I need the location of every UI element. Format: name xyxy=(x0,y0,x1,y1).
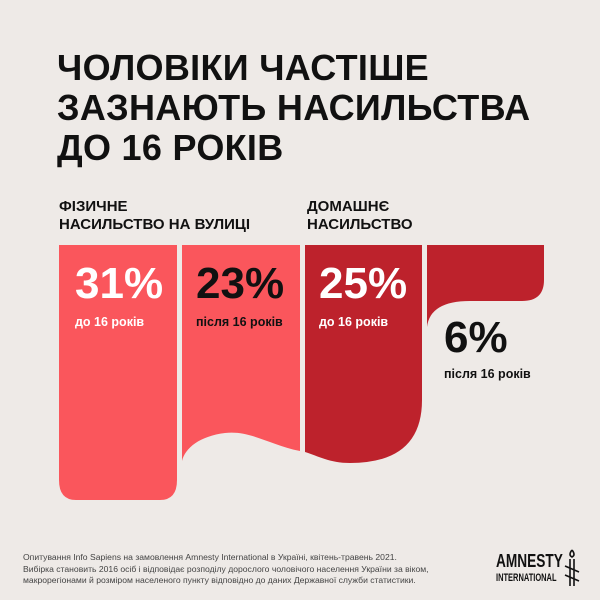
footnote xyxy=(23,552,429,585)
logo: Amnesty International: INTERNATIONAL xyxy=(496,572,557,584)
title xyxy=(57,47,530,168)
subheading: domestic violence: ДОМАШНЄ xyxy=(307,198,389,215)
footnote: Опитування Info Sapiens на замовлення Amnesty International в Україні, квітень-травень 2021. xyxy=(23,552,397,562)
value: 25%: до 16 років xyxy=(319,315,388,329)
value: 31%: 31% xyxy=(75,259,163,308)
title: ЗАЗНАЮТЬ НАСИЛЬСТВА xyxy=(57,87,530,128)
footnote: макрорегіонами й розміром населеного пункту відповідно до даних Державної служби статистики. xyxy=(23,575,416,585)
value: 25%: 25% xyxy=(319,259,407,308)
value: 6% xyxy=(444,313,531,381)
logo: Amnesty International: AMNESTY xyxy=(496,551,563,571)
title: ЧОЛОВІКИ ЧАСТІШЕ xyxy=(57,47,429,88)
value: 6%: 6% xyxy=(444,313,508,362)
subheading: street violence: ФІЗИЧНЕ xyxy=(59,198,128,215)
bar: 25% xyxy=(305,245,422,463)
bar: 6% xyxy=(427,245,544,327)
subheading: street violence: НАСИЛЬСТВО НА ВУЛИЦІ xyxy=(59,216,250,233)
value: 23%: 23% xyxy=(196,259,284,308)
footnote: Вибірка становить 2016 осіб і відповідає розподілу дорослого чоловічого населення України за віком, xyxy=(23,564,429,574)
bar: 31% xyxy=(59,245,177,500)
logo: Amnesty International xyxy=(496,550,580,586)
subheading: domestic violence xyxy=(307,198,413,233)
subheading: street violence xyxy=(59,198,250,233)
title: ДО 16 РОКІВ xyxy=(57,127,284,168)
bar: 23% xyxy=(182,245,300,461)
value: 6%: після 16 років xyxy=(444,367,531,381)
value: 31%: до 16 років xyxy=(75,315,144,329)
value: 23%: після 16 років xyxy=(196,315,283,329)
subheading: domestic violence: НАСИЛЬСТВО xyxy=(307,216,413,233)
